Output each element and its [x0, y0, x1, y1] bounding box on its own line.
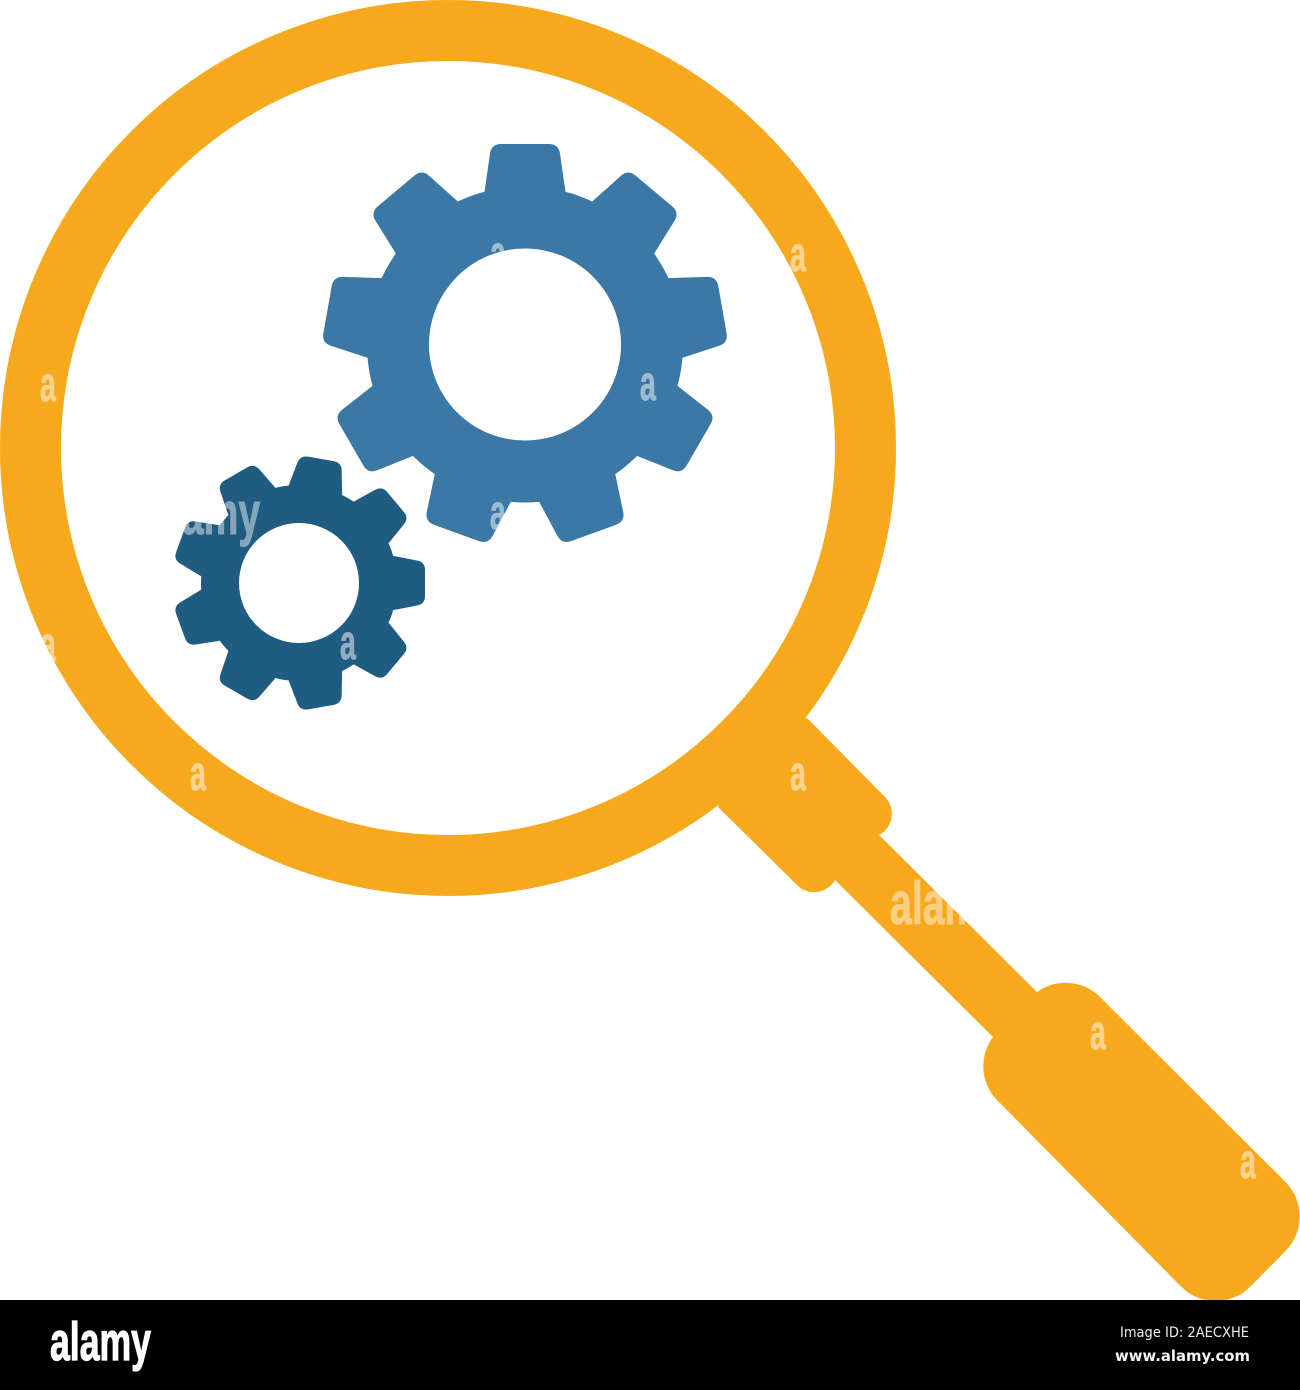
icon: large blue gear — [320, 144, 730, 547]
hole of small gear — [239, 523, 359, 643]
watermark text overlay: a — [1090, 1006, 1106, 1060]
watermark text overlay: a — [340, 616, 356, 670]
watermark text overlay: a — [490, 486, 506, 540]
watermark text overlay: alamy — [890, 870, 1001, 937]
image id: Image ID: 2AECXHE — [1120, 1325, 1249, 1341]
icon: small dark blue gear — [171, 454, 425, 712]
watermark text overlay — [40, 227, 1256, 1189]
hole of large gear — [429, 248, 621, 440]
magnifying glass handle — [718, 718, 1300, 1301]
watermark text overlay: alamy — [149, 480, 260, 547]
watermark text overlay: a — [1240, 1135, 1256, 1189]
watermark text overlay: a — [490, 227, 506, 281]
magnifying glass ring — [30, 30, 866, 866]
website url: www.alamy.com — [1115, 1347, 1250, 1365]
watermark text overlay: a — [790, 747, 806, 801]
footer bar — [0, 1300, 1300, 1390]
footer logo: alamy — [50, 1312, 151, 1372]
watermark text overlay: a — [190, 747, 206, 801]
watermark text overlay: a — [40, 618, 56, 672]
watermark text overlay: a — [640, 357, 656, 411]
watermark text overlay: a — [790, 228, 806, 282]
watermark text overlay: a — [40, 358, 56, 412]
